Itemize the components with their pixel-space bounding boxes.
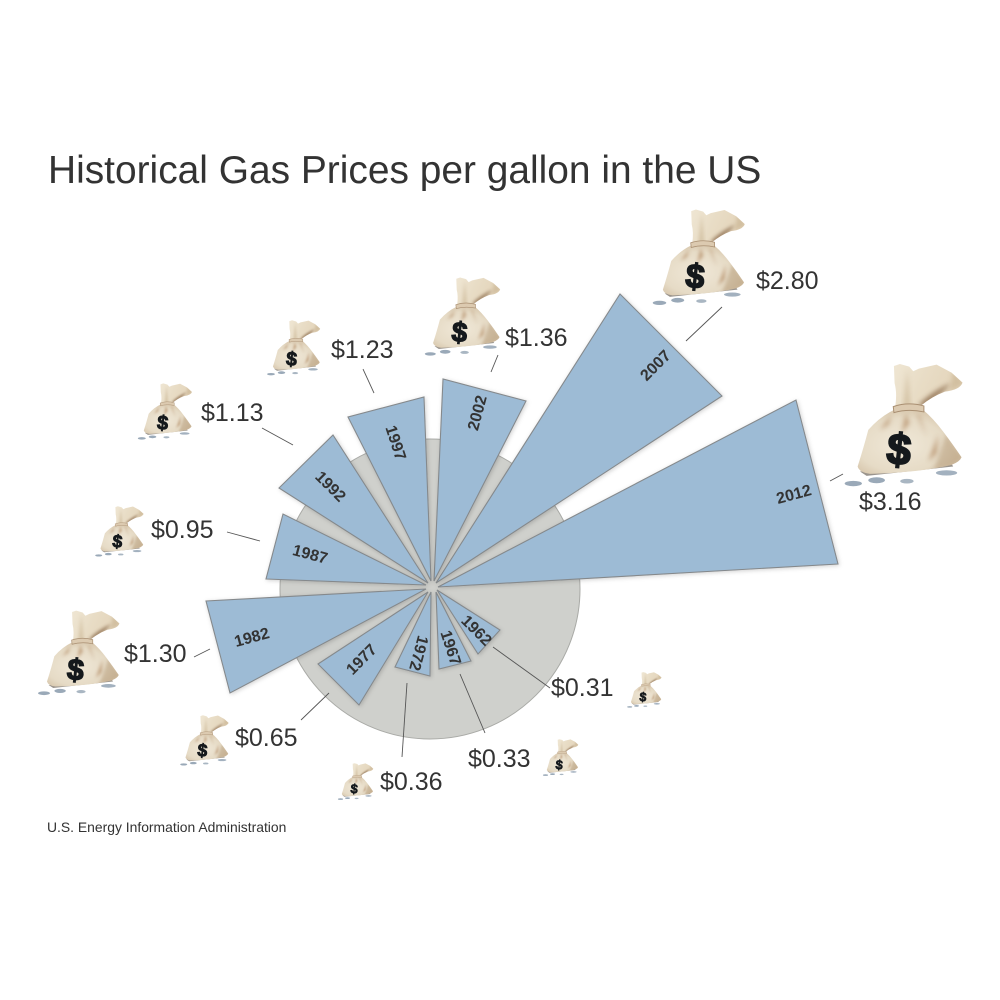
value: 1987: $0.95 (151, 516, 214, 544)
wedge 1962: 1962 (457, 612, 495, 650)
icon: money bag 1992: $ (156, 412, 169, 435)
icon: money bag 1977 (180, 715, 230, 766)
wedge 1977 (318, 592, 428, 705)
wedge 1967: 1967 (436, 628, 464, 668)
wedge 2007: 2007 (637, 347, 675, 385)
wedge 2002: 2002 (465, 394, 491, 432)
icon: money bag 1997 (267, 320, 321, 375)
icon: money bag 1967: $ (555, 757, 564, 773)
source note: U.S. Energy Information Administration (47, 819, 286, 835)
icon: money bag 1982 (38, 611, 121, 695)
icon: money bag 1992 (138, 383, 193, 440)
wedge 2012 (438, 400, 838, 587)
wedge 1987 (266, 514, 426, 585)
icon: money bag 1987: $ (112, 531, 124, 552)
wedge 1962 (437, 590, 500, 654)
wedge 1977: 1977 (343, 641, 381, 679)
icon: money bag 1997: $ (285, 348, 298, 371)
value: 1997: $1.23 (331, 336, 394, 364)
icon: money bag 1967 (543, 739, 579, 776)
icon: money bag 2007: $ (684, 257, 707, 297)
icon: money bag 2012 (845, 364, 965, 486)
icon: money bag 1977: $ (197, 740, 209, 761)
background circle (280, 439, 580, 739)
icon: money bag 1962: $ (639, 690, 647, 705)
icon: money bag 2012: $ (884, 425, 913, 475)
wedge 2002 (434, 379, 526, 581)
wedge 2007 (436, 294, 722, 583)
wedge 1982: 1982 (233, 625, 271, 651)
value: 2007: $2.80 (756, 267, 819, 295)
icon: money bag 1962 (627, 672, 662, 708)
wedge 1972 (395, 592, 431, 676)
leader lines (194, 307, 843, 757)
value: 1967: $0.33 (468, 745, 531, 773)
wedge 1972: 1972 (405, 634, 431, 672)
wedge 1967 (436, 592, 471, 669)
icon: money bag 2007 (653, 210, 747, 305)
wedge 2012: 2012 (775, 482, 813, 508)
icon: money bag 2002 (425, 277, 502, 356)
wedge 1992 (279, 435, 428, 583)
wedge 1987: 1987 (291, 542, 329, 568)
value: 1992: $1.13 (201, 399, 264, 427)
value: 1977: $0.65 (235, 724, 298, 752)
wedge 1997: 1997 (381, 423, 409, 463)
title: Historical Gas Prices per gallon in the US (48, 149, 761, 192)
value: 1962: $0.31 (551, 674, 614, 702)
icon: money bag 2002: $ (450, 316, 469, 348)
value: 2002: $1.36 (505, 324, 568, 352)
value: 1972: $0.36 (380, 768, 443, 796)
value: 1982: $1.30 (124, 640, 187, 668)
chart: polar wedge chart (206, 294, 838, 739)
icon: money bag 1972: $ (350, 781, 359, 797)
icon: money bag 1982: $ (65, 653, 86, 688)
value: 2012: $3.16 (859, 488, 922, 516)
wedge 1982 (206, 589, 426, 693)
icon: money bag 1987 (95, 506, 145, 557)
icon: money bag 1972 (338, 763, 374, 800)
wedge 1992: 1992 (311, 468, 349, 506)
wedge 1997 (348, 397, 431, 581)
